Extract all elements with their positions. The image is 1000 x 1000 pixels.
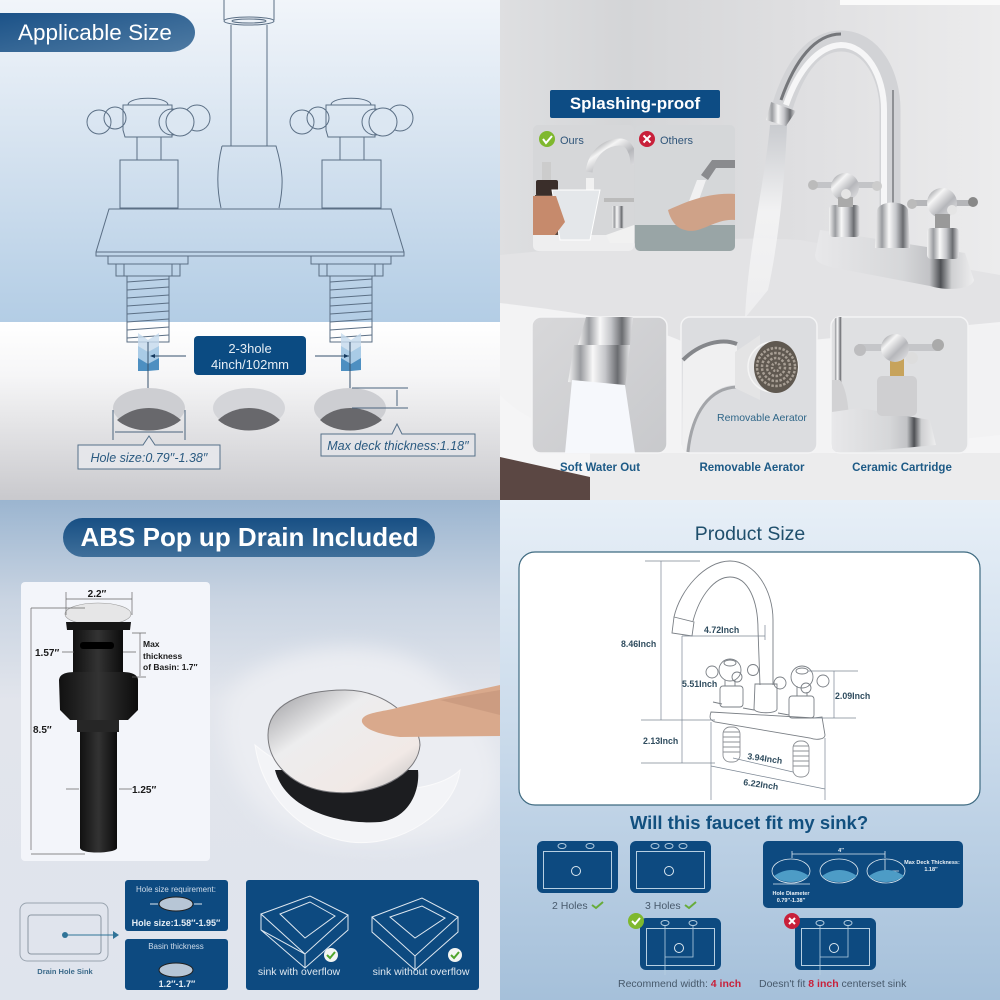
diagram: drain hole sink [20,903,119,976]
diagram: hole diameter and deck thickness [763,841,963,908]
card: faucet dimensions [519,552,980,805]
icon: green check, ours [539,131,584,147]
icon: red cross, others: Others [660,135,694,147]
label: 2-3hole spacing [194,336,306,375]
box: basin thickness: Basin thickness [148,942,204,951]
dimension labels: 4.72Inch [704,625,739,635]
panel: product size [500,500,1000,1000]
icon: green check, ours: Ours [560,135,584,147]
caption: recommend width: Recommend width: 4 inch [618,978,741,990]
box: sink overflow types: sink without overflow [373,966,470,978]
dimension labels: 6.22Inch [743,777,779,792]
comparison: others [635,160,735,251]
sink diagram: 2 holes [537,841,618,912]
black pop-up drain [59,603,138,853]
label: 2-3hole spacing: 2-3hole [228,341,272,356]
dimension labels [33,589,198,796]
heading: Will this faucet fit my sink?: Will this faucet fit my sink? [630,812,868,833]
box: basin thickness [125,939,228,990]
box: hole size requirement: Hole size requirement: [136,885,216,894]
diagram: hole diameter and deck thickness: 4″ [838,848,844,854]
card: removable aerator: Removable Aerator [717,412,807,424]
heading: Applicable Size: Applicable Size [18,20,172,45]
dimension labels: of Basin: 1.7″ [143,662,198,672]
dimension labels: 1.57″ [35,648,59,659]
heading: ABS Pop up Drain Included [63,518,435,557]
card: removable aerator [681,317,817,474]
box: sink overflow types [246,880,479,990]
dimension labels: 2.09Inch [835,691,870,701]
card: soft water out [532,317,667,474]
dimension labels: Max [143,639,160,649]
dimension labels [621,625,870,792]
box: hole size requirement [125,880,228,931]
callout: hole size: Hole size:0.79′′-1.38′′ [90,451,208,465]
faucet line diagram [87,0,413,342]
callout: max deck thickness: Max deck thickness:1.18′′ [327,439,469,453]
dimension labels: 2.2″ [88,589,107,600]
callout: hole size [78,410,220,469]
caption: doesn't fit: Doesn't fit 8 inch centerset sink [759,978,907,990]
diagram: drain hole sink: Drain Hole Sink [37,967,94,976]
callout: max deck thickness [321,388,475,456]
diagram: hole diameter and deck thickness: Max Deck Thickness: [904,860,960,866]
label: 2-3hole spacing: 4inch/102mm [211,357,289,372]
dimension labels: 3.94Inch [747,751,783,766]
panel: applicable size [0,0,500,500]
sink diagram: recommended 4 inch [628,913,721,975]
sink diagram: 2 holes: 2 Holes [552,900,588,912]
sink diagram: 3 holes [630,841,711,912]
panel: splashing-proof photo [500,0,1000,500]
main chrome faucet [745,34,978,318]
faucet outline [672,561,829,777]
sink diagram: 3 holes: 3 Holes [645,900,681,912]
drain photo: finger pressing cap [223,648,500,843]
diagram: hole diameter and deck thickness: 1.18″ [924,867,938,873]
arrows: chevrons and hole centre lines [138,333,361,388]
dimension lines [641,561,858,800]
card: soft water out: Soft Water Out [560,462,640,474]
heading: Splashing-proof: Splashing-proof [570,94,700,113]
diagram: hole diameter and deck thickness: Hole Diameter [772,891,810,897]
heading: Splashing-proof [550,90,720,118]
card: ceramic cartridge [831,317,968,474]
card: ceramic cartridge: Ceramic Cartridge [852,462,952,474]
dimension labels: thickness [143,651,182,661]
card: drain dimensions [21,582,210,861]
diagram: hole diameter and deck thickness: 0.79″-1.38″ [777,898,806,904]
sink diagram: 8 inch not fit [784,913,876,975]
card: removable aerator: Removable Aerator [699,462,805,474]
dimension labels: 1.25″ [132,785,156,796]
panel: pop up drain [0,500,500,1000]
dimension labels: 8.5″ [33,725,52,736]
box: basin thickness: 1.2′′-1.7′′ [159,979,195,989]
dimension labels: 2.13Inch [643,736,678,746]
dimension labels: 5.51Inch [682,679,717,689]
mounting holes [113,388,386,430]
heading: ABS Pop up Drain Included: ABS Pop up Drain Included [80,522,419,552]
heading: Applicable Size [0,13,195,52]
box: hole size requirement: Hole size:1.58′′-1.95′′ [132,918,220,928]
box: sink overflow types: sink with overflow [258,966,341,978]
dimension labels: 8.46Inch [621,639,656,649]
heading: Product Size: Product Size [695,523,805,545]
icon: red cross, others [639,131,694,147]
comparison: ours [533,138,634,251]
